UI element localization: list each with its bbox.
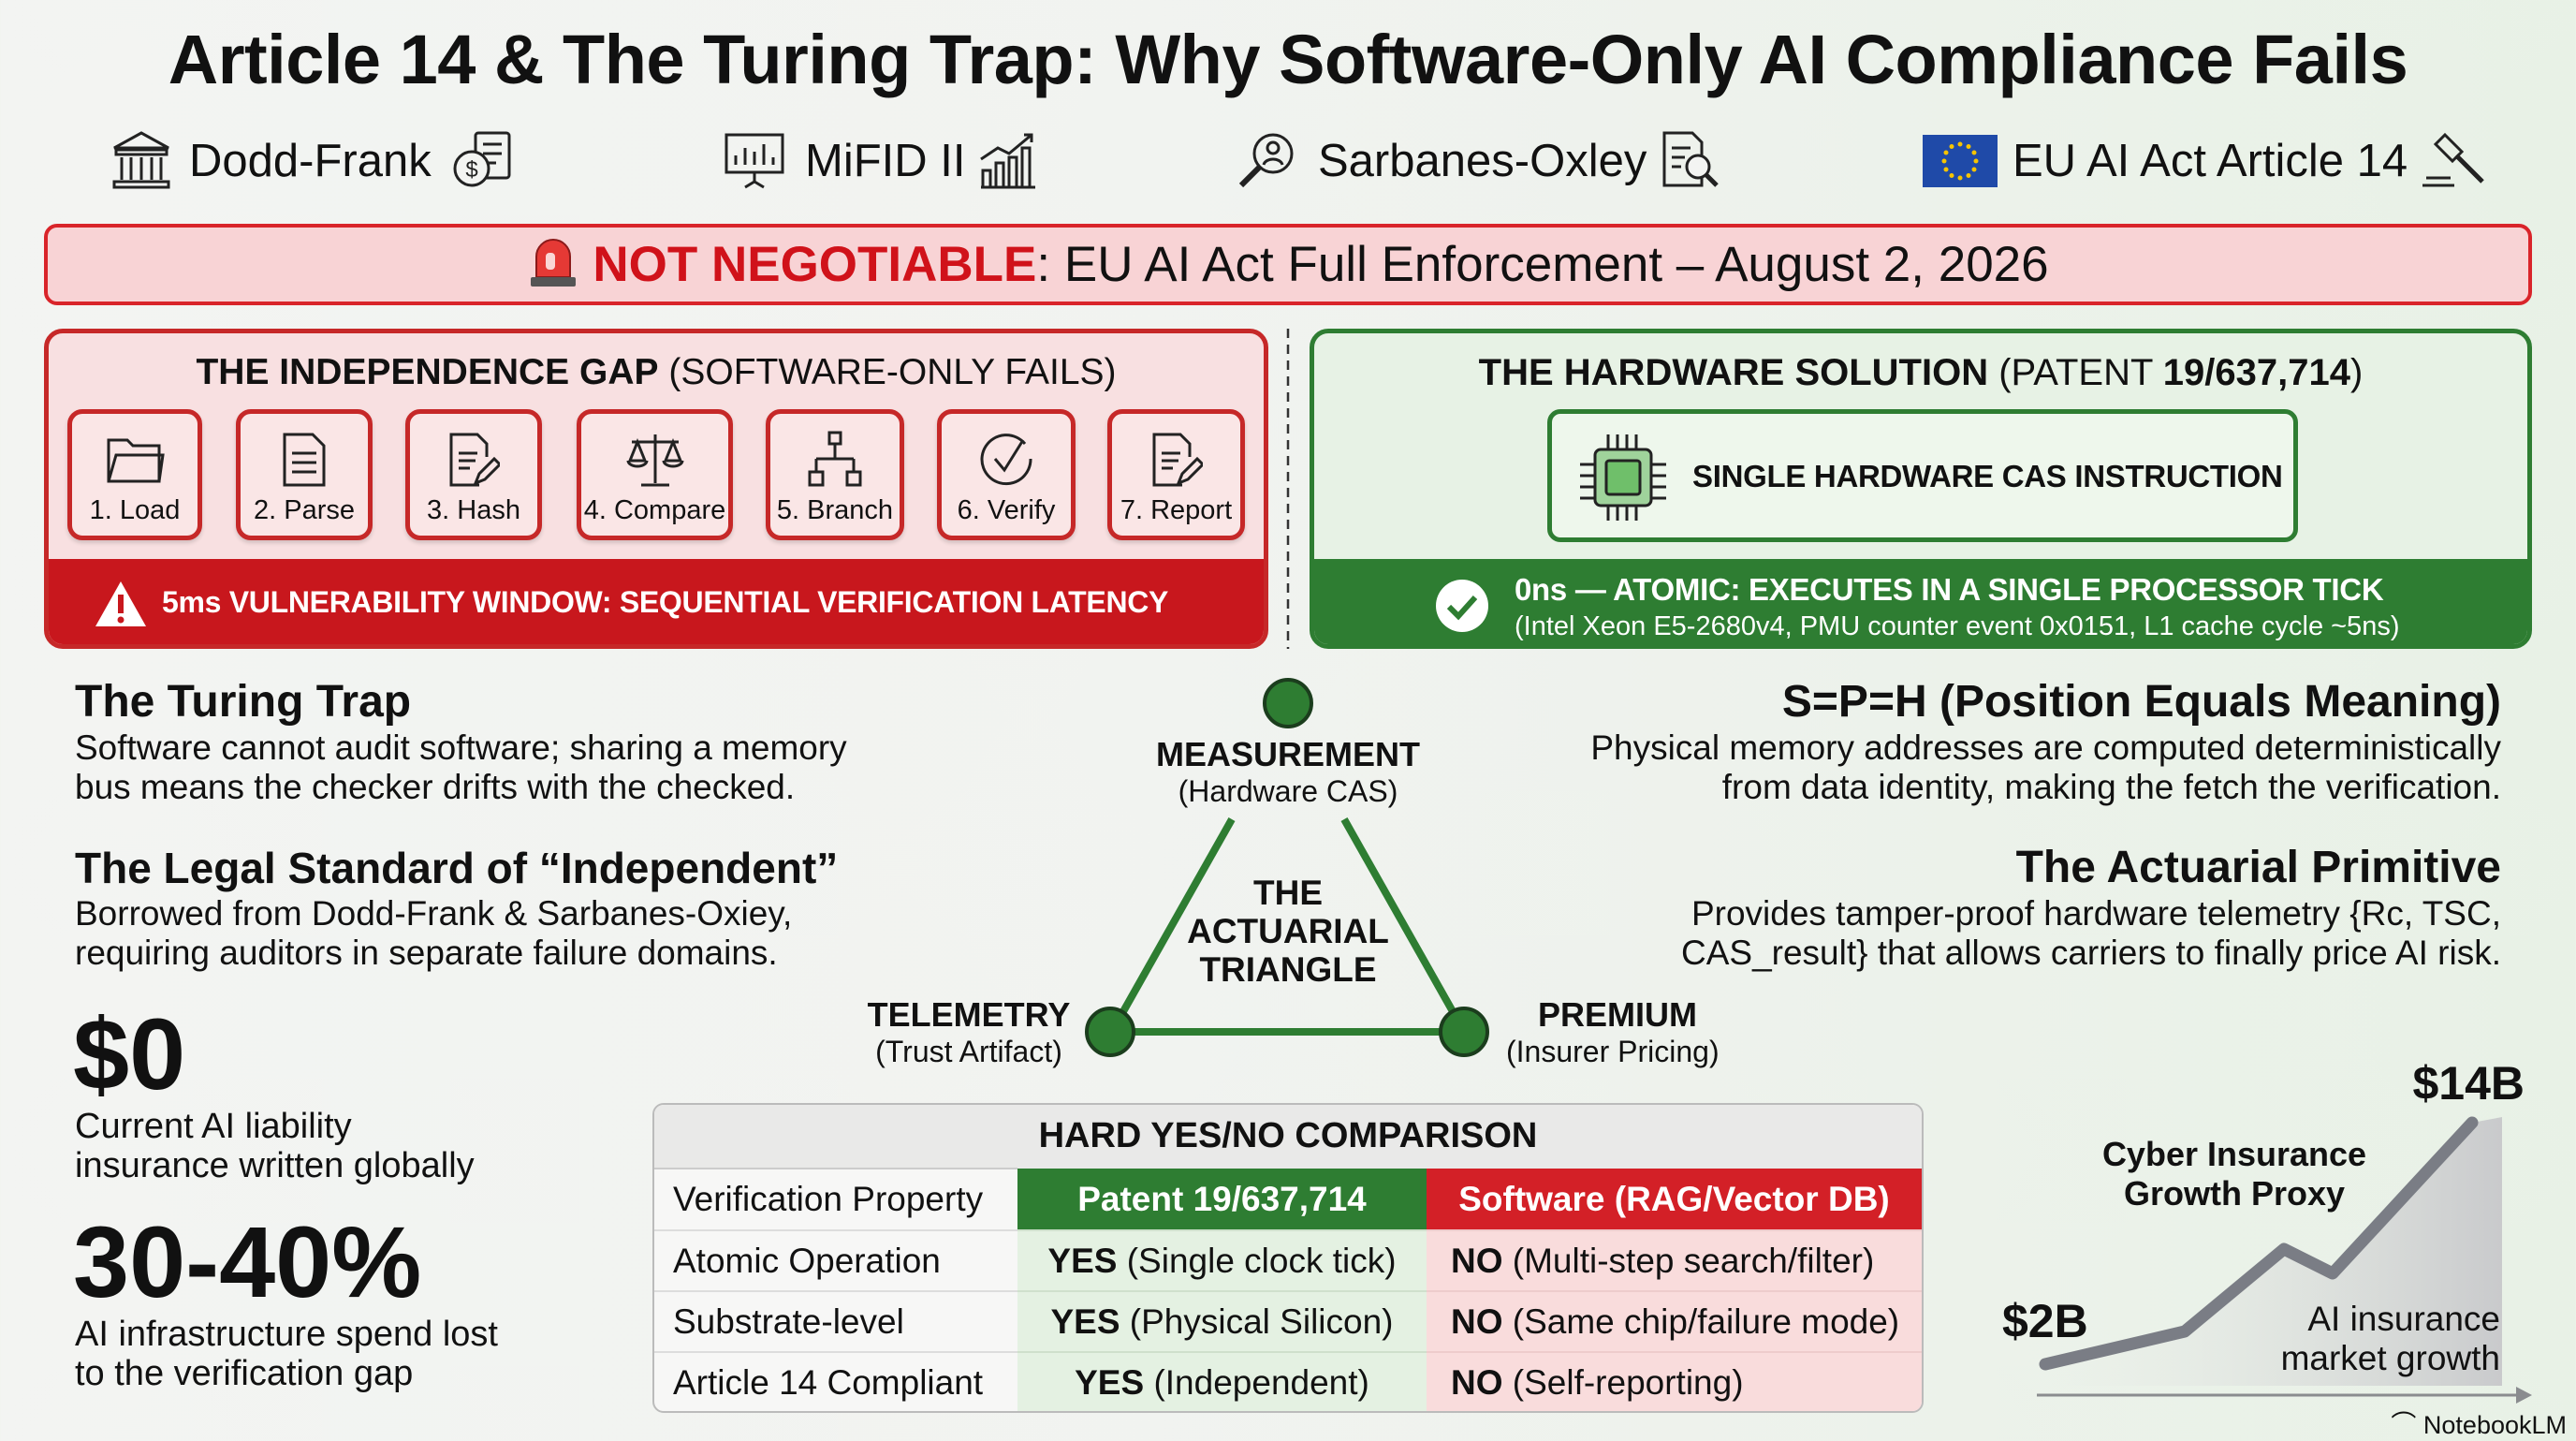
table: hard yes/no comparison: Verification Property — [673, 1180, 983, 1218]
label: cyber insurance: Cyber Insurance — [2102, 1135, 2366, 1173]
text: Dodd-Frank: Dodd-Frank — [189, 136, 432, 186]
text: MiFID II: MiFID II — [805, 136, 965, 186]
text: turing trap: bus means the checker drifts with the checked. — [75, 768, 795, 806]
label: premium — [1506, 995, 1720, 1068]
label: cyber insurance: Growth Proxy — [2124, 1174, 2345, 1213]
table: hard yes/no comparison: YES (Physical Silicon) — [1050, 1301, 1394, 1341]
label: AI insurance: AI insurance — [2307, 1300, 2500, 1338]
table: hard yes/no comparison: Atomic Operation — [673, 1242, 941, 1279]
stat: 30-40% — [73, 1205, 498, 1393]
table: hard yes/no comparison — [652, 1103, 1924, 1413]
icon: magnifier person — [1239, 133, 1294, 187]
table: hard yes/no comparison: NO (Multi-step search/filter) — [1451, 1242, 1874, 1279]
text: actuarial primitive — [1681, 843, 2501, 972]
panel: hardware solution — [1310, 329, 2532, 649]
label: actuarial triangle — [1187, 874, 1389, 989]
table: hard yes/no comparison: NO (Self-reporting) — [1451, 1363, 1744, 1402]
table: hard yes/no comparison: Patent 19/637,714 — [1077, 1180, 1367, 1217]
text: turing trap: The Turing Trap — [75, 677, 411, 727]
text: actuarial primitive: Provides tamper-proof hardware telemetry {Rc, TSC, — [1691, 894, 2501, 933]
label: actuarial triangle: TRIANGLE — [1199, 950, 1377, 989]
icon: document search — [1662, 131, 1719, 187]
brand: NotebookLM: ⌒ NotebookLM — [2391, 1411, 2567, 1439]
text: turing trap: Software cannot audit software; sharing a memory — [75, 728, 847, 767]
banner: not negotiable — [44, 224, 2532, 305]
text: legal standard: Borrowed from Dodd-Frank & Sarbanes-Oxiey, — [75, 894, 792, 933]
text: actuarial primitive: The Actuarial Primitive — [2016, 843, 2501, 892]
table: hard yes/no comparison: Article 14 Compliant — [673, 1363, 983, 1402]
label: measurement — [1156, 735, 1420, 808]
step 5 branch — [766, 409, 904, 540]
table: hard yes/no comparison: YES (Independent) — [1075, 1363, 1369, 1402]
chart: cyber insurance growth — [2002, 1057, 2567, 1439]
stat: $0 — [73, 997, 475, 1185]
text: legal standard: requiring auditors in separate failure domains. — [75, 934, 778, 972]
stat: $0: Current AI liability — [75, 1107, 352, 1146]
text: turing trap — [75, 677, 847, 806]
icon: chart board — [724, 133, 784, 189]
stat: 30-40%: AI infrastructure spend lost — [75, 1315, 498, 1354]
text: vulnerability window: 5ms VULNERABILITY WINDOW: SEQUENTIAL VERIFICATION LATENCY — [162, 585, 1168, 619]
stat: $0: $0 — [73, 997, 185, 1110]
text: S=P=H: S=P=H (Position Equals Meaning) — [1782, 677, 2501, 727]
text: S=P=H — [1590, 677, 2501, 806]
text: S=P=H: from data identity, making the fetch the verification. — [1722, 768, 2501, 806]
heading: hardware solution: THE HARDWARE SOLUTION (PATENT 19/637,714) — [1479, 352, 2363, 393]
icon: bank — [112, 131, 170, 189]
text: atomic: 0ns — ATOMIC: EXECUTES IN A SINGLE PROCESSOR TICK — [1515, 572, 2383, 607]
label: actuarial triangle: THE — [1253, 874, 1323, 912]
cas instruction box — [1547, 409, 2298, 542]
banner: not negotiable: NOT NEGOTIABLE: EU AI Act Full Enforcement – August 2, 2026 — [593, 237, 2049, 292]
label: telemetry: TELEMETRY — [868, 995, 1070, 1034]
label: measurement: MEASUREMENT — [1156, 735, 1420, 773]
icon: money doc: $ — [465, 157, 478, 183]
label: telemetry: (Trust Artifact) — [875, 1035, 1062, 1068]
icon: check — [1436, 580, 1488, 632]
warning band — [49, 559, 1264, 644]
table: hard yes/no comparison: YES (Single clock tick) — [1047, 1242, 1397, 1279]
step 4 compare — [577, 409, 733, 540]
step 2 parse — [236, 409, 373, 540]
label: AI insurance — [2281, 1300, 2500, 1377]
step 1 load — [67, 409, 202, 540]
label: $14B: $14B — [2412, 1057, 2525, 1110]
panel: independence gap — [44, 329, 1268, 649]
text: S=P=H: Physical memory addresses are computed deterministically — [1590, 728, 2501, 767]
title: Article 14 & The Turing Trap: Why Software-Only AI Compliance Fails — [168, 21, 2408, 98]
step 3 hash — [405, 409, 542, 540]
icon: gavel — [2422, 133, 2484, 187]
icon: warning — [95, 581, 146, 626]
step 7 report: 7. Report — [1120, 495, 1232, 525]
step 2 parse: 2. Parse — [254, 495, 355, 525]
step 6 verify — [937, 409, 1076, 540]
label: premium: (Insurer Pricing) — [1506, 1035, 1720, 1068]
atomic band — [1314, 559, 2527, 644]
label: premium: PREMIUM — [1538, 995, 1697, 1034]
chart: actuarial triangle — [868, 678, 1720, 1068]
text: Sarbanes-Oxley: Sarbanes-Oxley — [1318, 136, 1647, 186]
icon: money doc — [453, 131, 511, 187]
step 7 report — [1107, 409, 1245, 540]
table: hard yes/no comparison: Software (RAG/Vector DB) — [1458, 1180, 1890, 1217]
step 5 branch: 5. Branch — [777, 495, 893, 525]
label: measurement: (Hardware CAS) — [1178, 774, 1398, 808]
step 6 verify: 6. Verify — [958, 495, 1055, 525]
heading: independence gap: THE INDEPENDENCE GAP (SOFTWARE-ONLY FAILS) — [196, 352, 1117, 392]
step 4 compare: 4. Compare — [584, 495, 725, 525]
text: legal standard — [75, 844, 838, 972]
step 3 hash: 3. Hash — [427, 495, 520, 525]
stat: 30-40%: to the verification gap — [75, 1354, 413, 1393]
text: actuarial primitive: CAS_result} that allows carriers to finally price AI risk. — [1681, 934, 2501, 972]
step 1 load: 1. Load — [90, 495, 180, 525]
label: actuarial triangle: ACTUARIAL — [1187, 912, 1389, 950]
icon: EU flag — [1923, 135, 1998, 187]
stat: $0: insurance written globally — [75, 1146, 475, 1185]
steps row — [66, 409, 1247, 545]
label: $2B: $2B — [2002, 1295, 2088, 1347]
icon: siren — [531, 239, 576, 287]
label: cyber insurance — [2102, 1135, 2366, 1213]
icon: chip — [1580, 434, 1666, 521]
stat: 30-40%: 30-40% — [73, 1205, 421, 1318]
regulation row — [112, 131, 2484, 189]
text: EU AI Act Article 14: EU AI Act Article 14 — [2012, 136, 2408, 186]
label: AI insurance: market growth — [2281, 1339, 2500, 1377]
label: telemetry — [868, 995, 1070, 1068]
table: hard yes/no comparison: Substrate-level — [673, 1301, 904, 1341]
atomic band: (Intel Xeon E5-2680v4, PMU counter event 0x0151, L1 cache cycle ~5ns) — [1515, 611, 2399, 641]
text: legal standard: The Legal Standard of “Independent” — [75, 844, 838, 892]
text: single cas: SINGLE HARDWARE CAS INSTRUCTION — [1692, 459, 2283, 493]
icon: growth bars — [980, 133, 1035, 189]
table: hard yes/no comparison: HARD YES/NO COMPARISON — [1039, 1116, 1537, 1155]
table: hard yes/no comparison: NO (Same chip/failure mode) — [1451, 1301, 1899, 1341]
